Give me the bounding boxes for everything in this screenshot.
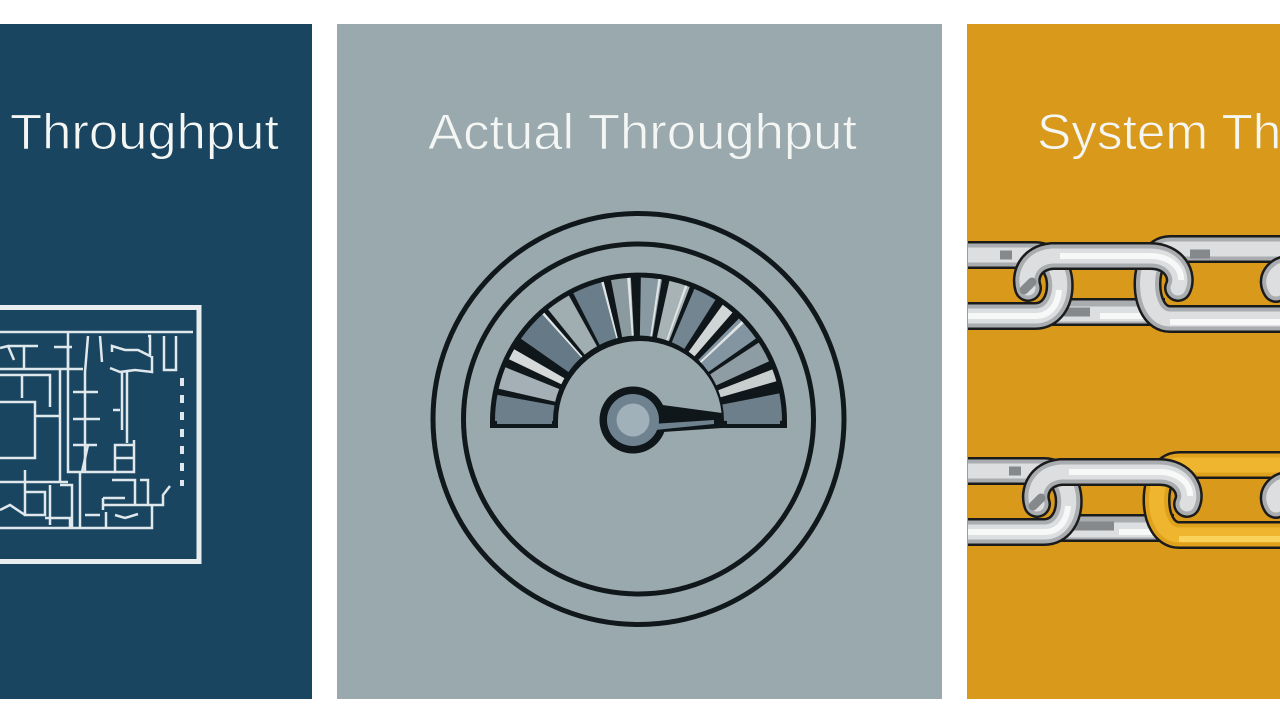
- icon: chains: [950, 249, 1280, 539]
- gauge outer rings: [433, 214, 844, 624]
- gauge needle: [648, 404, 722, 433]
- gauge segment highlights: [524, 307, 753, 421]
- gauge hub: [600, 386, 714, 454]
- chain: upper row: [950, 249, 1280, 322]
- panel: design throughput: [0, 24, 312, 699]
- icon: gauge: [433, 214, 844, 624]
- chain: lower row with gold link: [959, 465, 1280, 539]
- gauge dial band: [490, 273, 787, 428]
- heading: actual throughput: Actual Throughput: [428, 104, 857, 160]
- panel: actual throughput: [337, 24, 942, 699]
- icon: blueprint: [0, 308, 199, 562]
- heading: throughput: Throughput: [10, 104, 279, 160]
- panel: system throughput: [950, 24, 1280, 699]
- gold link: [1156, 465, 1280, 539]
- gauge dial segments: [497, 307, 780, 424]
